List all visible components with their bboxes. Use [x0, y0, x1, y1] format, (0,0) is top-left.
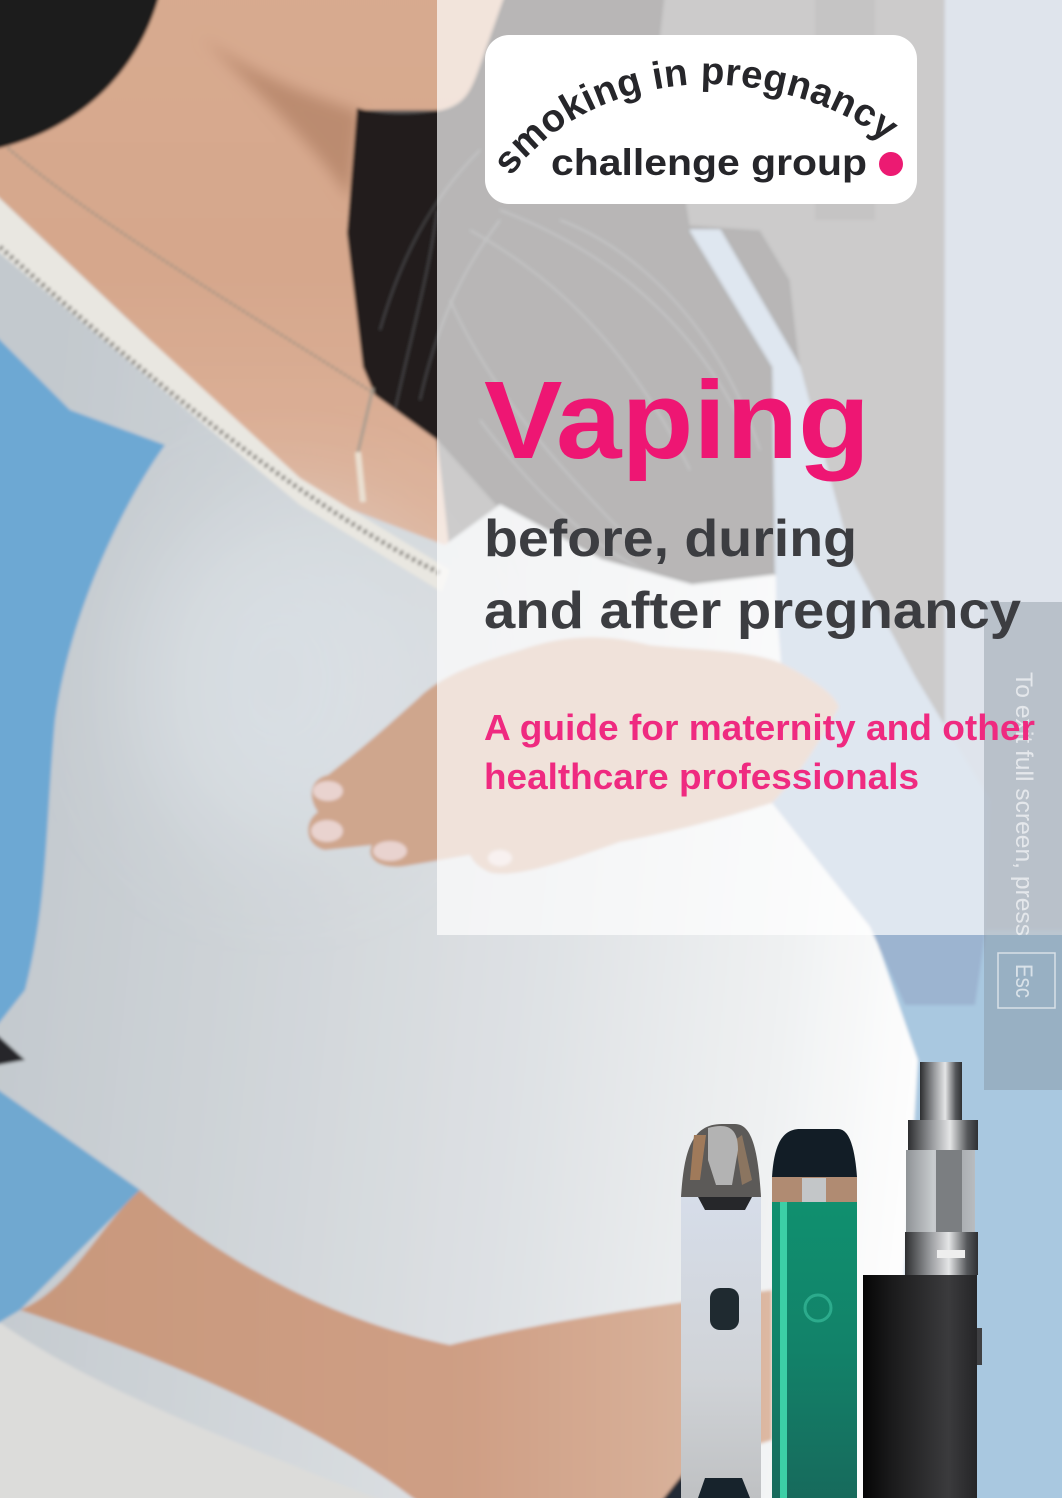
notice text: To exit full screen, press — [1010, 672, 1037, 936]
upper hand on belly — [308, 637, 839, 874]
full screen exit notice — [984, 602, 1062, 1090]
audience line: A guide for maternity and other — [484, 707, 1035, 748]
dark jeans at bottom edge — [630, 1472, 700, 1498]
translucent white text panel — [437, 0, 1062, 935]
logo lower text: challenge group — [551, 141, 867, 183]
blue sleeve right — [690, 230, 990, 1005]
neck and chest skin — [0, 0, 513, 575]
full screen exit notice: Esc — [1010, 964, 1037, 998]
shadow under chin — [200, 35, 360, 200]
audience line: healthcare professionals — [484, 756, 919, 797]
subheading: and after pregnancy — [484, 582, 1021, 640]
lower hand and arm — [20, 1190, 772, 1498]
heading: Vaping: Vaping — [484, 359, 870, 482]
vape device: green pod — [772, 1129, 857, 1498]
long dark hair — [0, 0, 800, 600]
necklace — [8, 148, 373, 502]
logo: smoking in pregnancy challenge group — [485, 35, 917, 204]
vape device: black box mod with tank — [863, 1062, 982, 1498]
subheading — [484, 510, 1021, 640]
audience line — [484, 707, 1035, 797]
hair strands — [380, 150, 760, 590]
blue cardigan left — [0, 310, 165, 1340]
logo pink dot — [879, 152, 903, 176]
white top and pregnant belly — [0, 170, 918, 1498]
logo arched text: smoking in pregnancy — [498, 60, 898, 173]
vape device: silver pod — [681, 1124, 761, 1498]
subheading: before, during — [484, 510, 857, 568]
fingernails — [311, 781, 512, 866]
